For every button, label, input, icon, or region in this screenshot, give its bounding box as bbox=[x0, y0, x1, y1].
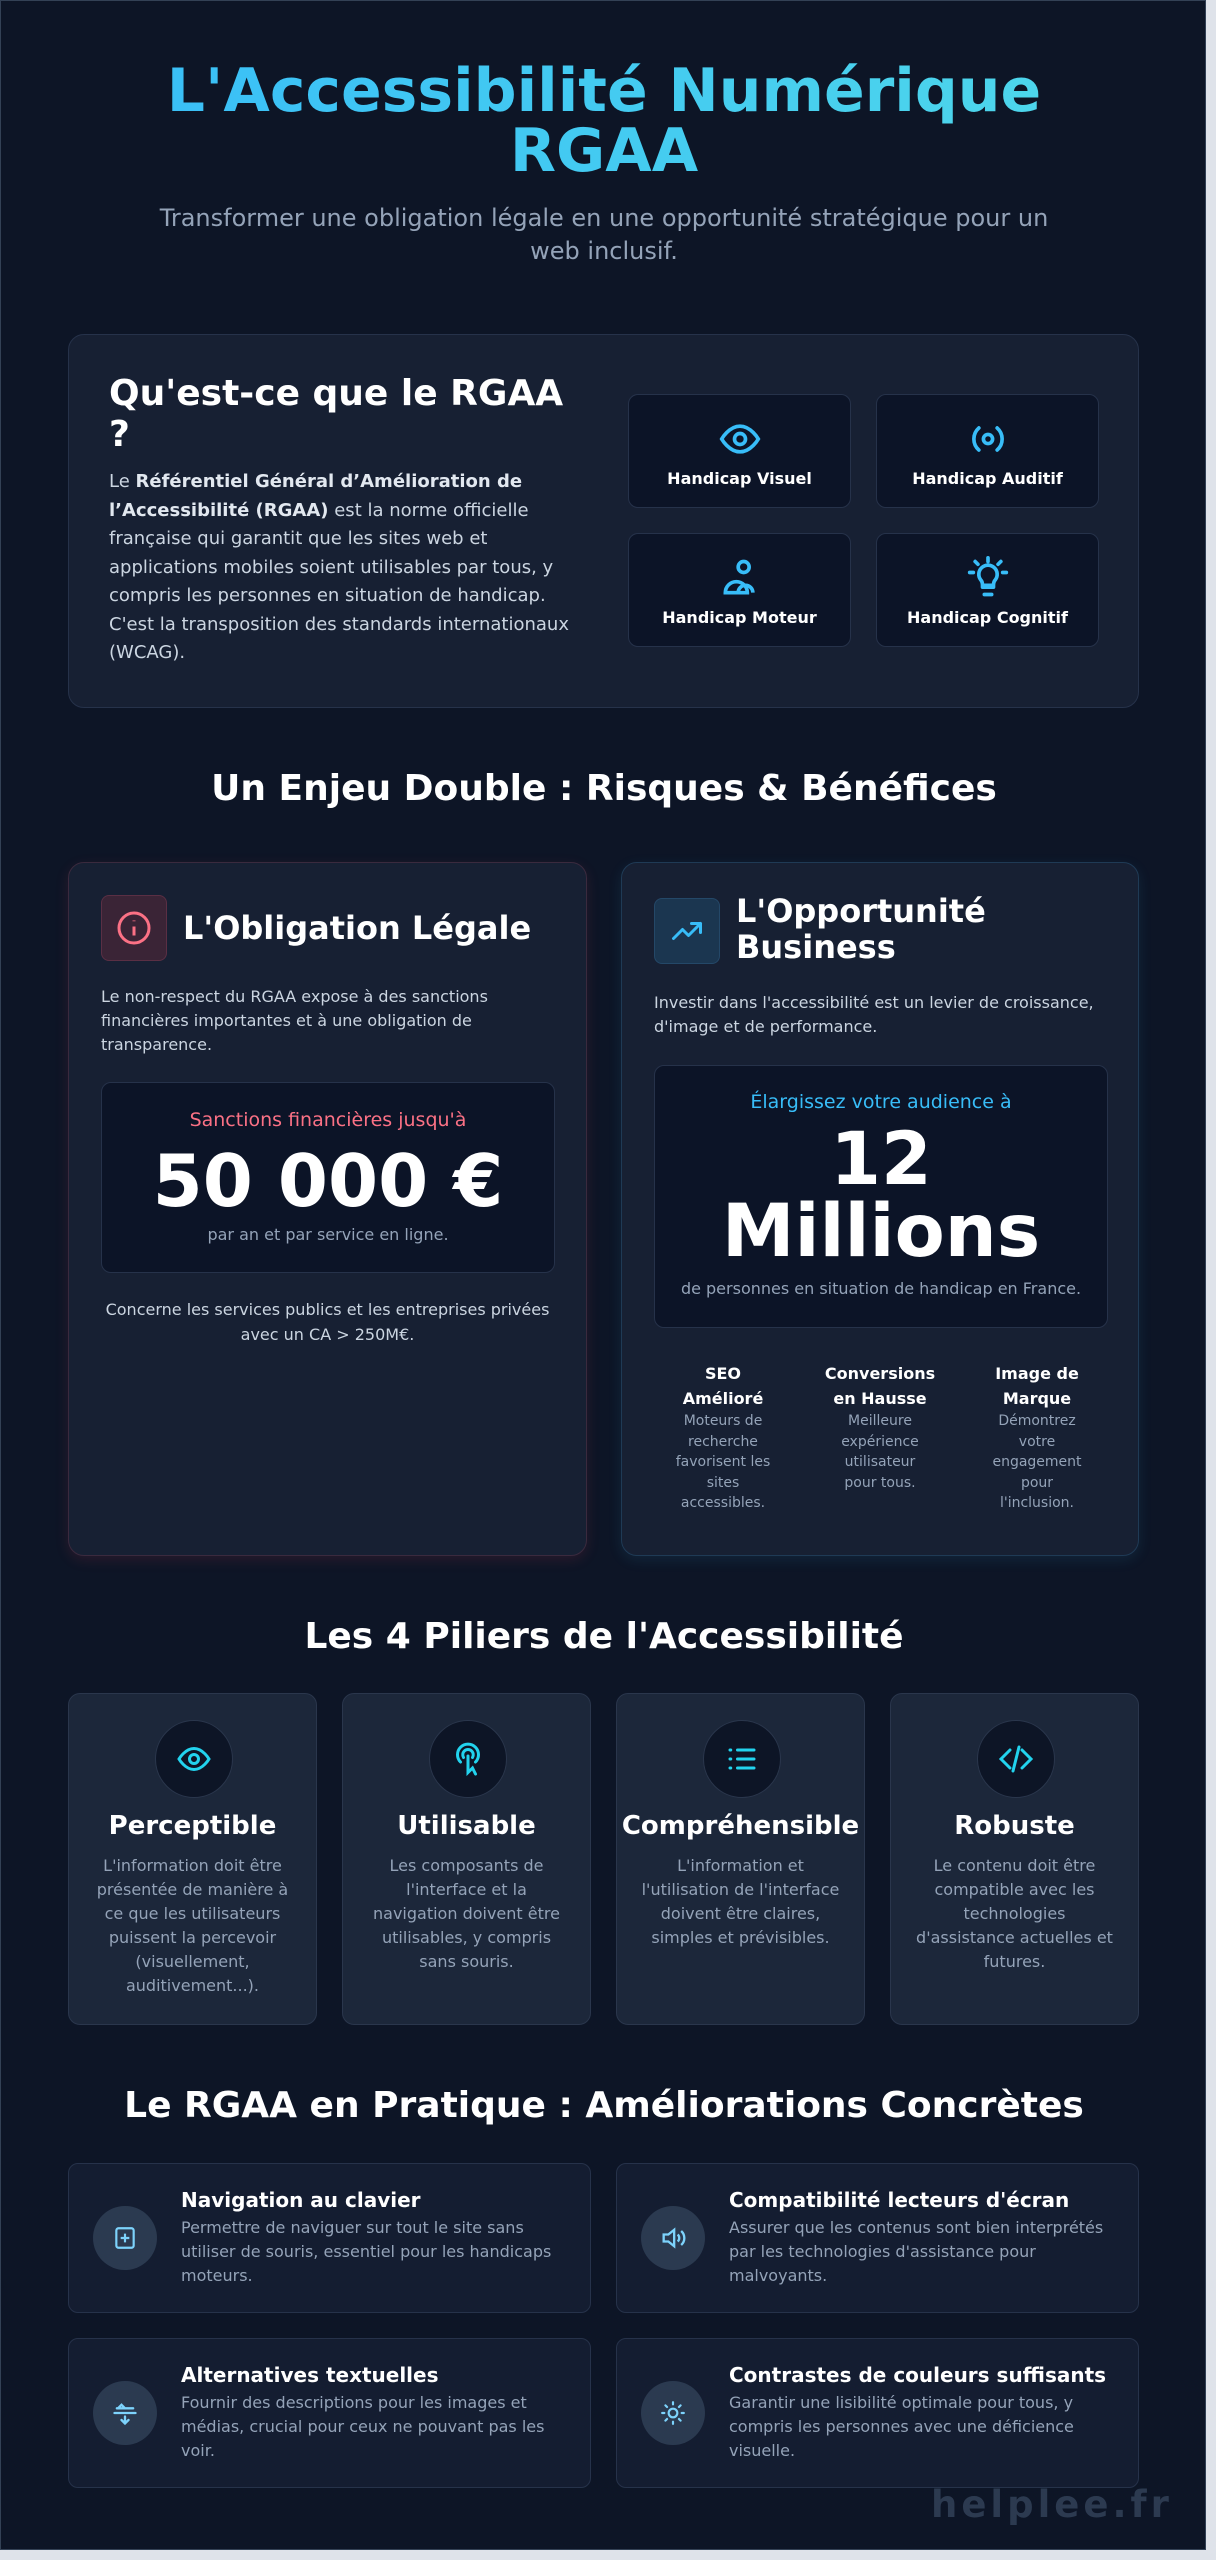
pillar: robuste bbox=[890, 1693, 1139, 2025]
pillar: perceptible: L'information doit être présentée de manière à ce que les utilisateurs puissent la percevoir (visuellement, auditivement...). bbox=[97, 1856, 288, 1995]
icon: broadcast bbox=[972, 426, 1004, 452]
panel: qu'est-ce que le RGAA bbox=[68, 334, 1139, 708]
icon: key bbox=[93, 2206, 157, 2270]
practice: alternatives: Alternatives textuelles bbox=[181, 2363, 439, 2387]
card: handicap cognitif bbox=[876, 533, 1099, 647]
heading: L'Obligation Légale bbox=[183, 909, 531, 947]
title: RGAA bbox=[510, 116, 698, 186]
icon: bulb bbox=[968, 556, 1008, 596]
icon: text bbox=[93, 2381, 157, 2445]
pillar: perceptible: Perceptible bbox=[109, 1811, 276, 1841]
stat box bbox=[101, 1082, 555, 1273]
practice: lecteurs d'écran: Compatibilité lecteurs d'écran bbox=[729, 2188, 1069, 2212]
title: L'Accessibilité Numérique bbox=[167, 56, 1041, 126]
practice: lecteurs d'écran bbox=[616, 2163, 1139, 2313]
benefit: image: Image de Marque bbox=[995, 1364, 1079, 1408]
stat box: 50 000 € bbox=[153, 1139, 503, 1223]
icon: pointer bbox=[429, 1720, 507, 1798]
practice: clavier: Permettre de naviguer sur tout le site sans utiliser de souris, essentiel pour les handicaps moteurs. bbox=[181, 2218, 551, 2285]
practice: lecteurs d'écran: Assurer que les contenus sont bien interprétés par les technologies d'assistance pour malvoyants. bbox=[729, 2218, 1103, 2285]
icon: eye bbox=[720, 424, 760, 454]
card: handicap cognitif: Handicap Cognitif bbox=[907, 608, 1068, 627]
benefit: conversions: Meilleure expérience utilisateur pour tous. bbox=[841, 1413, 919, 1490]
icon: code bbox=[977, 1720, 1055, 1798]
icon: sun bbox=[641, 2381, 705, 2445]
pillar: perceptible bbox=[68, 1693, 317, 2025]
icon: trend bbox=[654, 898, 720, 964]
icon: speaker bbox=[641, 2206, 705, 2270]
card: handicap visuel bbox=[628, 394, 851, 508]
card: handicap moteur: Handicap Moteur bbox=[662, 608, 817, 627]
benefit: image: Démontrez votre engagement pour l'inclusion. bbox=[992, 1413, 1082, 1511]
stat box: 12 bbox=[830, 1117, 932, 1202]
stat box: Millions bbox=[722, 1189, 1040, 1274]
icon: person bbox=[724, 560, 755, 594]
heading: L'Opportunité bbox=[736, 892, 986, 930]
practice: alternatives: Fournir des descriptions pour les images et médias, crucial pour ceux ne pouvant pas les voir. bbox=[181, 2393, 544, 2460]
heading: pratique: Le RGAA en Pratique : Améliorations Concrètes bbox=[124, 2085, 1084, 2126]
pillar: utilisable bbox=[342, 1693, 591, 2025]
icon: info bbox=[101, 895, 167, 961]
practice: alternatives bbox=[68, 2338, 591, 2488]
pillar: compréhensible bbox=[616, 1693, 865, 2025]
pillar: compréhensible: L'information et l'utilisation de l'interface doivent être claires, simples et prévisibles. bbox=[642, 1856, 839, 1947]
heading: Qu'est-ce que le RGAA ? bbox=[109, 373, 563, 455]
stat box: de personnes en situation de handicap en France. bbox=[681, 1279, 1081, 1298]
benefit: SEO: Amélioré bbox=[683, 1389, 763, 1408]
card: handicap moteur bbox=[628, 533, 851, 647]
title bbox=[61, 61, 1147, 181]
icon: eye bbox=[155, 1720, 233, 1798]
text: Investir dans l'accessibilité est un levier de croissance, d'image et de performance. bbox=[654, 993, 1094, 1036]
card: handicap visuel: Handicap Visuel bbox=[667, 469, 812, 488]
practice: contrastes bbox=[616, 2338, 1139, 2488]
panel: obligation légale bbox=[68, 862, 587, 1556]
pillar: utilisable: Les composants de l'interface et la navigation doivent être utilisables, y compris sans souris. bbox=[373, 1856, 560, 1971]
stat box: Sanctions financières jusqu'à bbox=[190, 1109, 466, 1131]
stat box: par an et par service en ligne. bbox=[207, 1225, 449, 1244]
benefit: SEO: SEO bbox=[705, 1364, 741, 1383]
stat box bbox=[654, 1065, 1108, 1328]
practice: clavier: Navigation au clavier bbox=[181, 2188, 421, 2212]
heading: piliers: Les 4 Piliers de l'Accessibilité bbox=[304, 1616, 904, 1657]
panel: opportunité business bbox=[621, 862, 1139, 1556]
heading bbox=[736, 892, 986, 966]
benefit: image bbox=[992, 1364, 1082, 1511]
stat box: Élargissez votre audience à bbox=[750, 1091, 1012, 1113]
heading: enjeu double: Un Enjeu Double : Risques & Bénéfices bbox=[211, 768, 997, 809]
pillar: utilisable: Utilisable bbox=[397, 1811, 536, 1841]
benefit: SEO: Moteurs de recherche favorisent les sites accessibles. bbox=[676, 1413, 770, 1511]
heading: Business bbox=[736, 928, 896, 966]
icon: list bbox=[703, 1720, 781, 1798]
watermark: helplee.fr bbox=[931, 2483, 1173, 2526]
benefit: conversions bbox=[825, 1364, 935, 1490]
pillar: compréhensible: Compréhensible bbox=[622, 1811, 859, 1841]
note: Concerne les services publics et les entreprises privées avec un CA > 250M€. bbox=[106, 1300, 549, 1344]
benefit: conversions: Conversions en Hausse bbox=[825, 1364, 935, 1408]
card: handicap auditif: Handicap Auditif bbox=[912, 469, 1063, 488]
subtitle: Transformer une obligation légale en une opportunité stratégique pour un web inclusif. bbox=[160, 204, 1048, 265]
card: handicap auditif bbox=[876, 394, 1099, 508]
pillar: robuste: Le contenu doit être compatible avec les technologies d'assistance actuelles et futures. bbox=[916, 1856, 1113, 1971]
text block: Le Référentiel Général d’Amélioration de l’Accessibilité (RGAA) est la norme officielle française qui garantit que les sites web et applications mobiles soient utilisables par tous, y compris les personnes en situation de handicap. C'est la transposition des standards internationaux (WCAG). bbox=[109, 471, 569, 663]
practice: clavier bbox=[68, 2163, 591, 2313]
practice: contrastes: Garantir une lisibilité optimale pour tous, y compris les personnes avec une déficience visuelle. bbox=[729, 2393, 1074, 2460]
text: Le non-respect du RGAA expose à des sanctions financières importantes et à une obligation de transparence. bbox=[101, 987, 488, 1054]
benefit: SEO bbox=[676, 1364, 770, 1511]
practice: contrastes: Contrastes de couleurs suffisants bbox=[729, 2363, 1106, 2387]
pillar: robuste: Robuste bbox=[954, 1811, 1075, 1841]
